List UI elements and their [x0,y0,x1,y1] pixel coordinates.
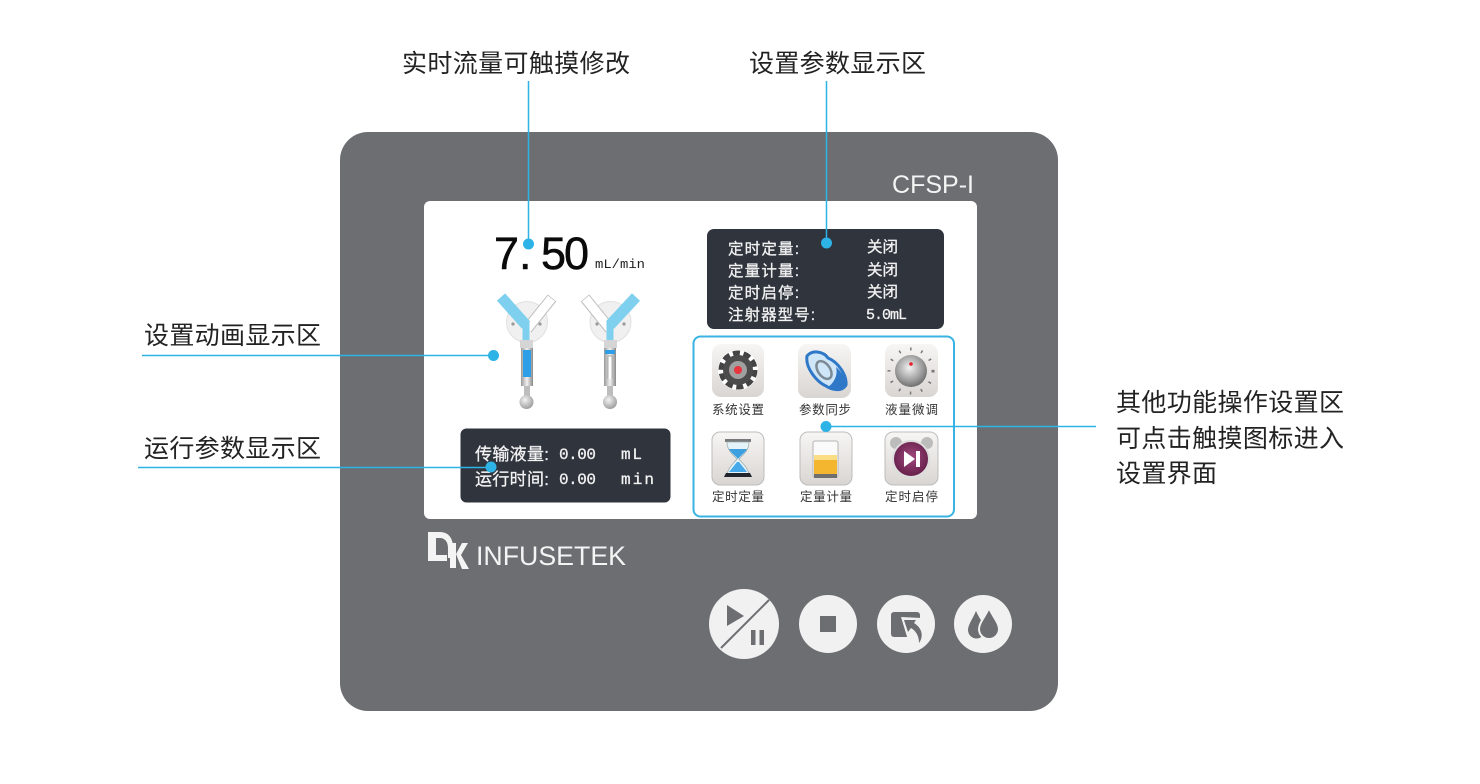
icon: quantitative metering: 定量计量 [800,489,852,504]
icon: system settings: 系统设置 [712,402,764,417]
model label: CFSP-I [892,171,974,199]
callout: realtime flow: 实时流量可触摸修改 [402,50,630,78]
running parameters panel: 传输液量: [475,445,549,464]
icon: quantitative metering [800,432,852,504]
realtime flow value: 50 [541,228,588,279]
icon: timed start stop [885,432,938,504]
callout: animation area [142,322,499,361]
callout: running parameters: 运行参数显示区 [144,435,321,463]
callout: settings parameters [749,50,926,248]
icon: timed dosing: 定时定量 [712,489,764,504]
animation: left pump [501,297,552,409]
callout: settings parameters: 设置参数显示区 [749,50,926,78]
settings parameters panel: 定时启停: [728,284,799,302]
button: return [877,595,935,653]
realtime flow value: mL/min [595,258,645,272]
callout: other functions: 设置界面 [1116,460,1217,488]
callout: running parameters [138,435,496,472]
callout: animation area: 设置动画显示区 [144,322,321,350]
settings parameters panel: 5.0mL [866,307,907,324]
settings parameters panel: 定时定量: [728,240,799,258]
brand logo [428,532,626,571]
running parameters panel [460,428,670,502]
icon: timed dosing [712,432,764,504]
settings parameters panel: 关闭 [867,283,898,301]
function icon area outline [694,336,954,516]
settings parameters panel: 关闭 [867,238,898,256]
touch screen [424,201,977,519]
callout: other functions: 可点击触摸图标进入 [1116,425,1344,453]
callout: other functions: 其他功能操作设置区 [1116,389,1344,417]
realtime flow value: 7. [494,228,532,279]
button: drain drops [954,595,1012,653]
callout: realtime flow [402,50,630,250]
icon: system settings [712,344,764,417]
running parameters panel: min [621,471,654,489]
icon: fine adjust [885,344,938,417]
settings parameters panel: 关闭 [867,261,898,279]
device panel [340,132,1058,711]
running parameters panel: 0.00 [559,471,596,489]
settings parameters panel: 定量计量: [728,262,799,280]
button: stop [799,595,857,653]
icon: parameter sync [798,344,851,417]
running parameters panel: 运行时间: [475,470,549,489]
icon: timed start stop: 定时启停 [885,489,938,504]
icon: fine adjust: 液量微调 [885,402,938,417]
callout: other functions [820,389,1344,488]
settings parameters panel [707,229,944,329]
settings parameters panel: 注射器型号: [728,306,815,324]
button: play / pause [709,589,779,659]
realtime flow value [494,228,645,279]
running parameters panel: mL [621,446,642,464]
icon: parameter sync: 参数同步 [799,402,851,417]
animation: right pump [585,297,636,409]
running parameters panel: 0.00 [559,446,596,464]
brand logo: INFUSETEK [476,541,626,571]
